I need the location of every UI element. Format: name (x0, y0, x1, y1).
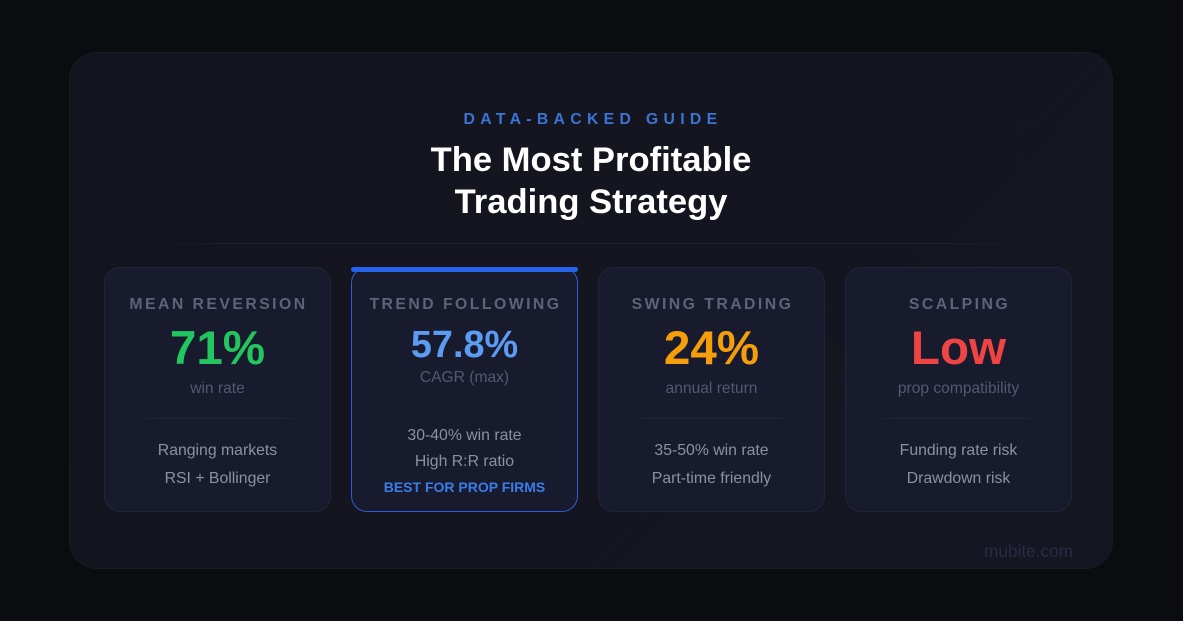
stat caption: prop compatibility (898, 380, 1019, 396)
badge: best for prop firms: BEST FOR PROP FIRMS (384, 479, 545, 495)
stat: low: Low (911, 322, 1006, 375)
title: The Most Profitable (431, 141, 751, 179)
title (431, 141, 751, 221)
detail: ranging markets: Ranging markets (158, 442, 277, 459)
eyebrow heading: DATA-BACKED GUIDE (464, 110, 722, 128)
card label: SCALPING (909, 296, 1010, 312)
main panel (69, 52, 1113, 569)
stat: 24%: 24% (664, 322, 759, 375)
detail: drawdown: Drawdown risk (907, 470, 1010, 487)
detail: win rate: 35-50% win rate (654, 442, 769, 459)
card label: MEAN REVERSION (129, 296, 308, 312)
header divider (138, 243, 1044, 244)
detail: part-time: Part-time friendly (652, 470, 771, 487)
stat caption: annual return (666, 380, 757, 396)
stat: 57.8%: 57.8% (411, 324, 518, 366)
detail: risk reward: High R:R ratio (415, 452, 514, 470)
watermark: mubite.com (984, 541, 1073, 561)
stat caption: CAGR (max) (420, 369, 509, 386)
top accent bar (351, 267, 578, 272)
panel: swing trading (598, 267, 825, 512)
detail: funding rate: Funding rate risk (900, 442, 1017, 459)
title: Trading Strategy (455, 183, 727, 221)
card label: SWING TRADING (632, 296, 793, 312)
detail: indicators: RSI + Bollinger (165, 470, 270, 487)
detail: win rate: 30-40% win rate (407, 426, 522, 444)
stat caption: win rate (190, 380, 245, 396)
panel: trend following (highlighted) (351, 267, 578, 512)
card label: TREND FOLLOWING (369, 296, 562, 312)
stat: 71%: 71% (170, 322, 265, 375)
panel: mean reversion (104, 267, 331, 512)
panel: scalping (845, 267, 1072, 512)
